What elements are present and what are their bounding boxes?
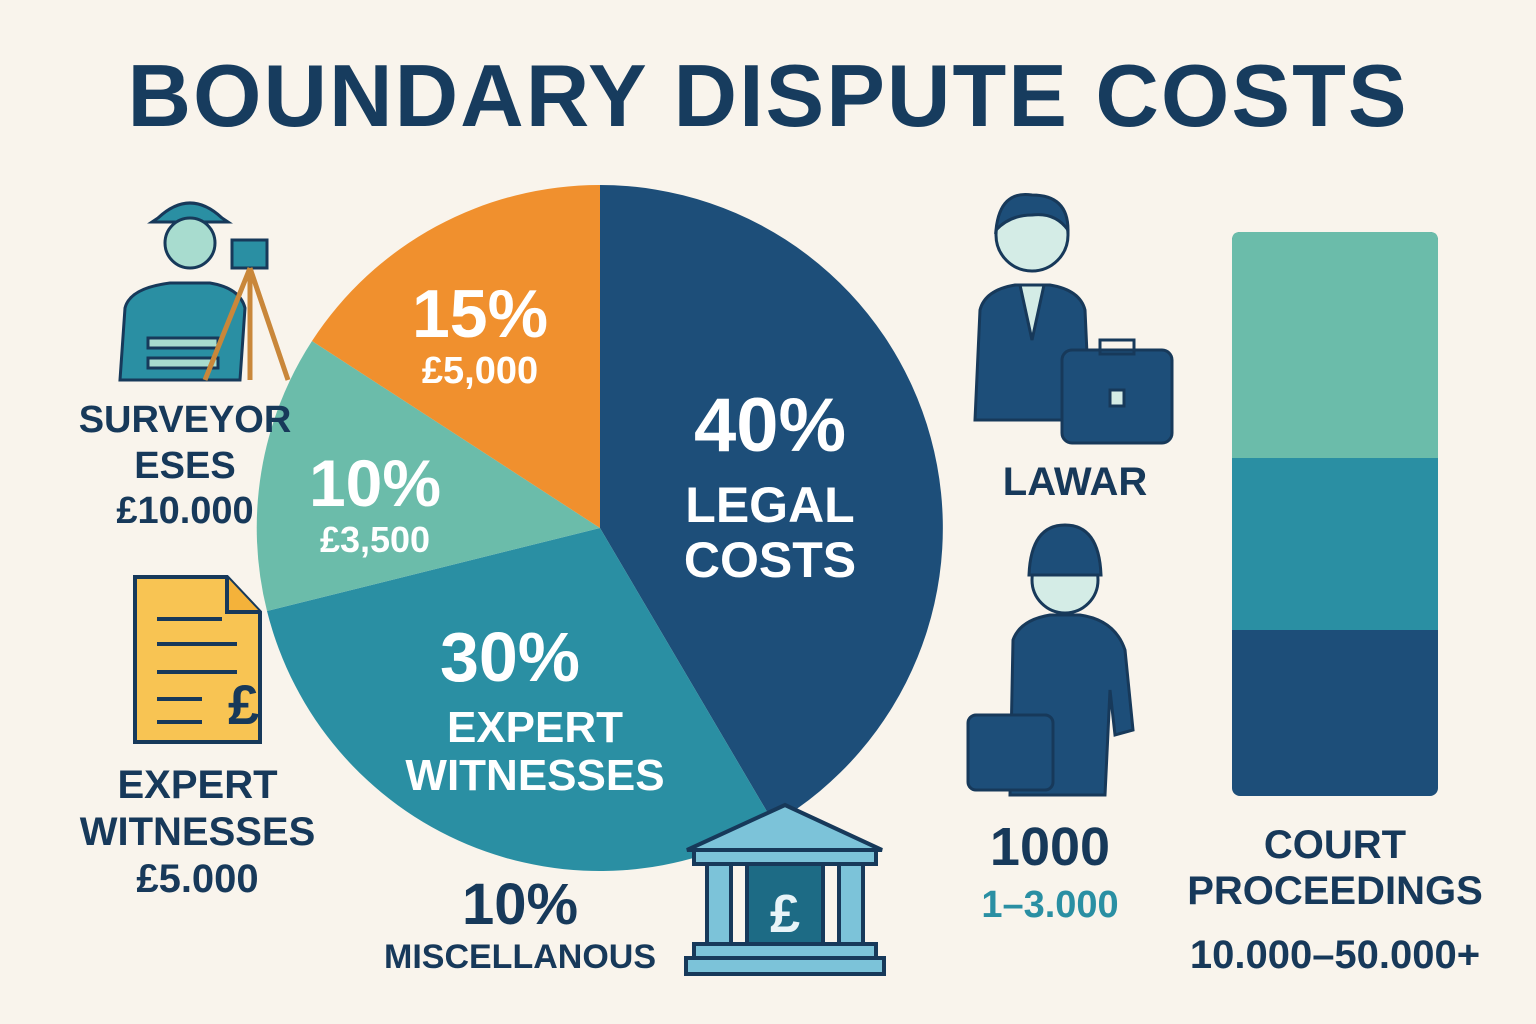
text: 1000 amounts: 1000 bbox=[990, 817, 1110, 877]
icon: bank: £ bbox=[770, 884, 800, 944]
label: legal 40%: 40% bbox=[694, 383, 846, 468]
text: misc 10%: MISCELLANOUS bbox=[384, 938, 656, 976]
text: 1000 amounts: 1–3.000 bbox=[981, 884, 1119, 926]
text: 1000 amounts bbox=[981, 817, 1119, 926]
title: BOUNDARY DISPUTE COSTS bbox=[127, 46, 1409, 145]
label: teal 30%: 30% bbox=[440, 618, 580, 696]
icon: barrister bbox=[966, 524, 1135, 796]
text: surveyor fees: SURVEYOR bbox=[79, 399, 291, 441]
label: light teal 10%: £3,500 bbox=[320, 519, 430, 560]
icon: document bbox=[133, 575, 262, 744]
text: surveyor fees: £10.000 bbox=[116, 490, 254, 532]
label: orange 15% bbox=[412, 276, 548, 392]
text: lawar: LAWAR bbox=[1003, 460, 1147, 504]
text: court proceedings bbox=[1187, 823, 1483, 977]
label: light teal 10%: 10% bbox=[309, 446, 441, 520]
label: teal 30% bbox=[405, 618, 665, 800]
icon: bank bbox=[684, 802, 886, 976]
text: expert witnesses bbox=[80, 763, 315, 901]
text: court proceedings: COURT bbox=[1264, 823, 1406, 867]
text: misc 10% bbox=[384, 872, 656, 976]
bar: court stacked bbox=[1232, 232, 1438, 796]
label: teal 30%: EXPERT bbox=[447, 703, 623, 752]
text: expert witnesses: £5.000 bbox=[136, 857, 259, 901]
icon: lawyer bbox=[973, 193, 1174, 444]
label: legal 40%: COSTS bbox=[684, 532, 856, 588]
icon: surveyor bbox=[118, 201, 290, 382]
text: court proceedings: PROCEEDINGS bbox=[1187, 869, 1483, 913]
label: legal 40%: LEGAL bbox=[685, 477, 855, 533]
text: expert witnesses: EXPERT bbox=[117, 763, 278, 807]
label: legal 40% bbox=[684, 383, 856, 588]
label: teal 30%: WITNESSES bbox=[405, 751, 665, 800]
text: misc 10%: 10% bbox=[462, 872, 578, 937]
text: surveyor fees: ESES bbox=[134, 445, 236, 487]
icon: document: £ bbox=[228, 673, 259, 736]
label: orange 15%: £5,000 bbox=[422, 350, 538, 392]
text: expert witnesses: WITNESSES bbox=[80, 810, 315, 854]
label: light teal 10% bbox=[309, 446, 441, 560]
label: orange 15%: 15% bbox=[412, 276, 548, 352]
text: court proceedings: 10.000–50.000+ bbox=[1190, 933, 1480, 977]
text: surveyor fees bbox=[79, 399, 291, 532]
